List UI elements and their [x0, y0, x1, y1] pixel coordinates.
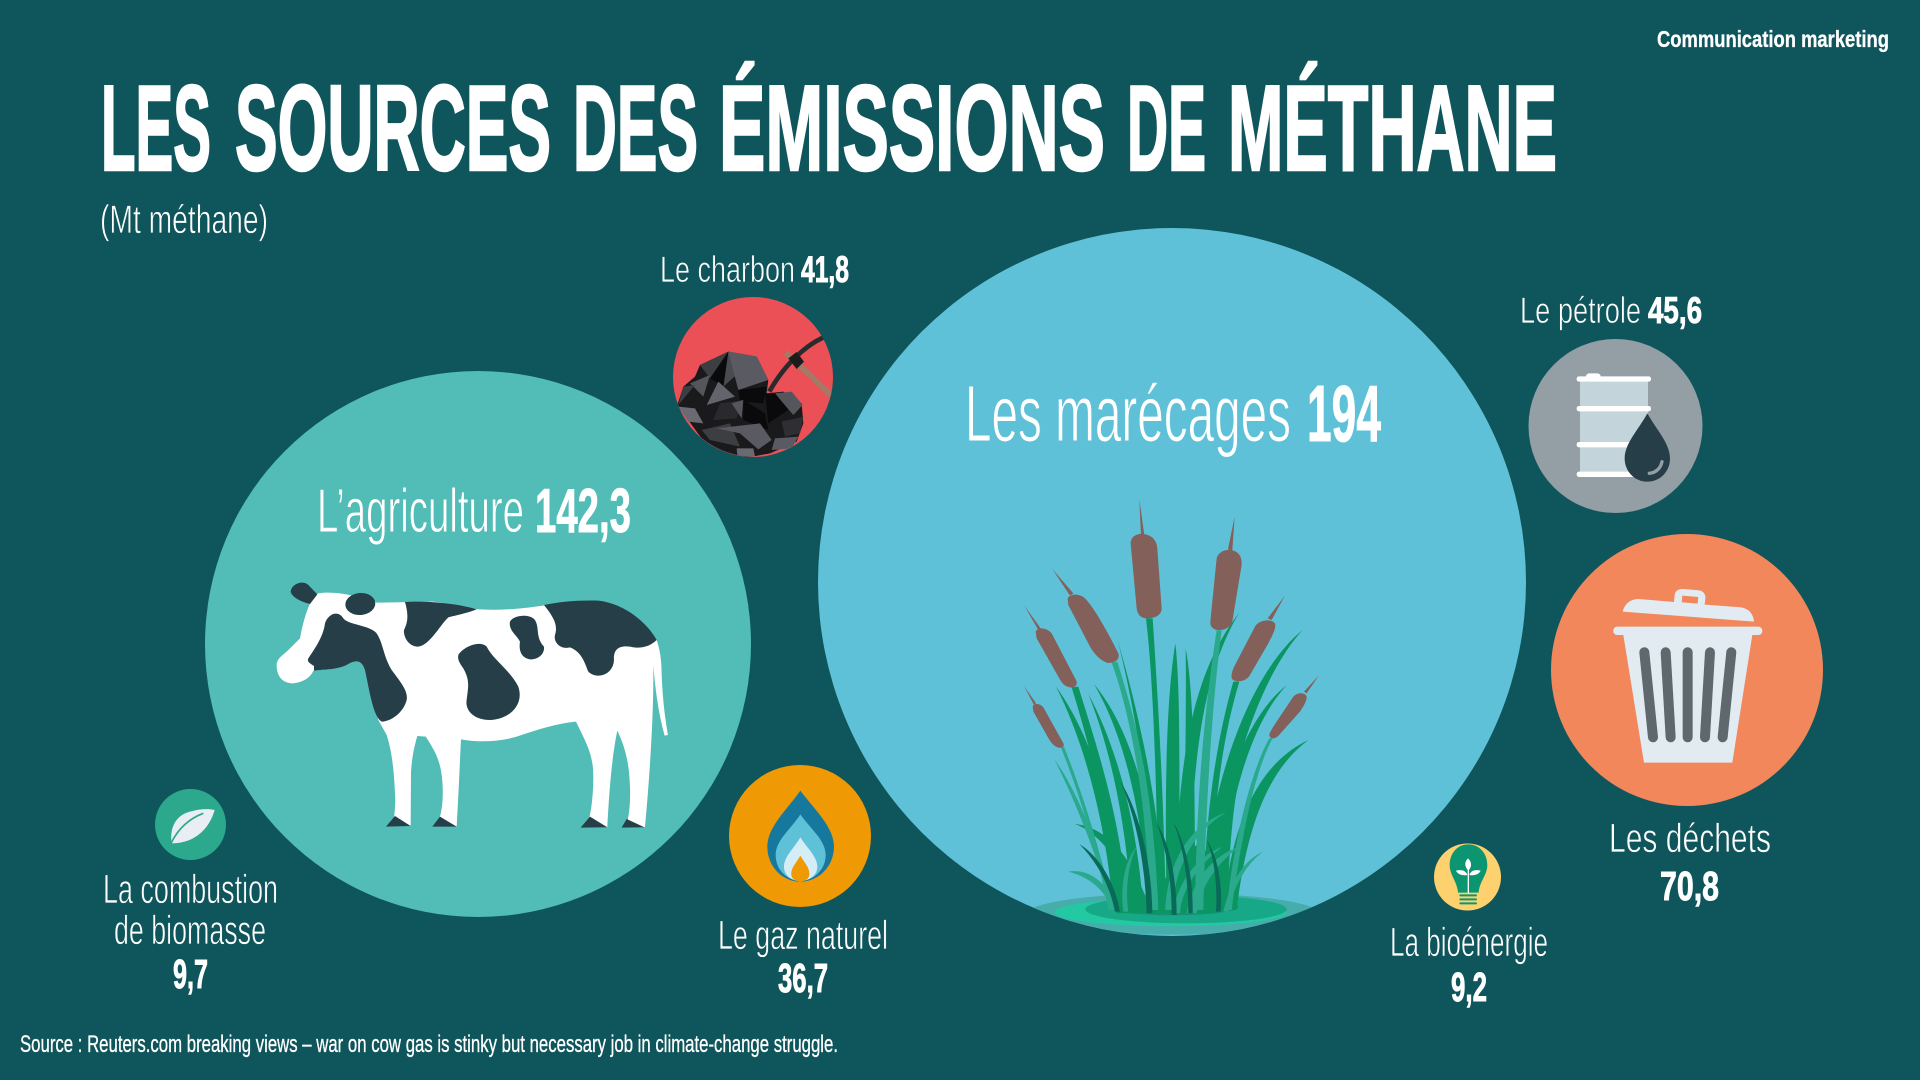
panel: bioénergie — [1390, 844, 1548, 1010]
cattail heads — [1024, 499, 1319, 748]
icon: leaf — [171, 809, 215, 843]
label: pétrole: 45,6 — [1648, 290, 1702, 331]
icon: bulb with sprout — [1450, 844, 1487, 903]
label: bioénergie: La bioénergie — [1390, 919, 1548, 965]
icon: cow — [277, 583, 668, 828]
icon: trash can — [1613, 589, 1762, 763]
reeds lighter leaves — [1054, 630, 1273, 913]
label: gaz naturel: Le gaz naturel — [718, 912, 888, 958]
label: déchets: Les déchets — [1609, 815, 1771, 861]
panel: déchets — [1551, 534, 1823, 909]
panel: agriculture — [205, 371, 751, 917]
label: charbon: Le charbon — [660, 249, 795, 290]
icon: gas flame — [767, 791, 834, 882]
pond — [1027, 893, 1320, 935]
title: MÉTHANE — [1228, 60, 1557, 196]
label: combustion de biomasse: 9,7 — [173, 951, 208, 997]
label: marécages: 194 — [1307, 369, 1381, 458]
label: déchets: 70,8 — [1660, 863, 1719, 909]
icon: coal and pickaxe — [677, 337, 833, 458]
title: ÉMISSIONS — [719, 60, 1105, 196]
panel: charbon — [660, 249, 849, 458]
panel: pétrole — [1520, 290, 1702, 513]
title — [101, 60, 1557, 196]
label: charbon: 41,8 — [801, 249, 849, 290]
label: marécages: Les marécages — [965, 369, 1291, 458]
title: SOURCES — [235, 60, 551, 196]
label: combustion de biomasse — [103, 866, 278, 997]
label: bioénergie — [1390, 919, 1548, 1010]
title: DE — [1127, 60, 1206, 196]
icon: cattails in a pond — [1024, 499, 1320, 935]
label: pétrole: Le pétrole — [1520, 290, 1641, 331]
panel: combustion de biomasse — [103, 789, 278, 997]
icon: oil barrel and drop — [1577, 373, 1670, 482]
label: combustion de biomasse: La combustion — [103, 866, 278, 912]
label: agriculture: 142,3 — [535, 477, 631, 546]
reeds leaves — [1056, 613, 1308, 913]
reeds dark leaves — [1079, 782, 1221, 915]
title: LES — [101, 60, 211, 196]
label: déchets — [1609, 815, 1771, 909]
source note: Source : Reuters.com breaking views – war on cow gas is stinky but necessary job in climate-change struggle. — [20, 1031, 838, 1058]
panel: gaz naturel — [718, 765, 888, 1001]
label: agriculture: L’agriculture — [317, 477, 524, 546]
label: gaz naturel — [718, 912, 888, 1001]
label: bioénergie: 9,2 — [1451, 964, 1487, 1010]
title: DES — [573, 60, 698, 196]
label: combustion de biomasse: de biomasse — [114, 907, 266, 953]
subtitle: unit: (Mt méthane) — [100, 198, 268, 242]
panel: marécages — [818, 228, 1526, 936]
label: gaz naturel: 36,7 — [778, 955, 828, 1001]
